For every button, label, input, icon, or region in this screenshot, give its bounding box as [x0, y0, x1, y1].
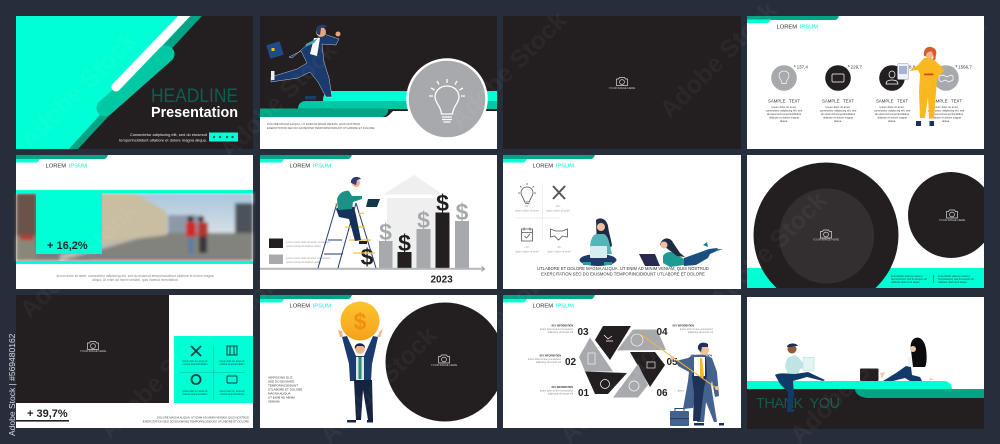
step numbers [565, 327, 678, 399]
social icon bar [209, 132, 238, 142]
key information notes: Ipsum dolor sit amet consectetur [540, 328, 573, 331]
text list: TEMPORINCIDIDUNT [268, 384, 298, 388]
key information notes: Ipsum dolor sit amet consectetur [528, 358, 561, 361]
slide 4: four icons with values: aliqua. [942, 119, 950, 123]
illustration: seated man [775, 343, 825, 412]
step numbers: 04 [656, 327, 668, 338]
illustration: man on ladder [318, 177, 380, 268]
stock watermark: Adobe Stock [864, 11, 992, 139]
key information notes: KEY INFORMATION [540, 354, 561, 358]
cyan icon panel: Ipsum dolor sit, amet elit [220, 360, 245, 363]
values: $ [848, 64, 850, 68]
icon labels: Ipsum dolor sit amet [515, 250, 539, 254]
legend: nostrud temporincididunt dolore [286, 245, 322, 248]
values: 229,7 [851, 64, 862, 70]
cyan icon panel: Ipsum dolor sit, amet elit [183, 390, 208, 393]
large circle placeholder [386, 302, 504, 422]
icon: calendar [522, 228, 532, 241]
metric: +39,7% [16, 408, 69, 422]
slide 4: four icons with values: utlabore et dolore magna [877, 116, 907, 120]
cyan icon panel: nostrud temporincididunt [219, 393, 245, 396]
bar chart: $ [456, 199, 469, 225]
slide 4: four icons with values: Ipsum dolor sit amet, [826, 105, 851, 109]
callout: +16,2%: + 16,2% [47, 240, 88, 252]
icon labels: Ipsum dolor sit amet [546, 208, 570, 212]
slide 4: four icons with values: utlabore et dolore magna [823, 116, 853, 120]
header tab [16, 155, 108, 162]
footer text: Sed eiusmod, sed do tempor elit [938, 278, 974, 281]
slide 7: four icons with women on laptops: EXERCITATION SEO DO EIUSMOND TEMPORINCIDIDUNT UTLABORE ET DOLORE [541, 272, 705, 276]
faded bank [383, 175, 443, 268]
icon: gold coin: $ [354, 308, 367, 334]
icon circles [771, 65, 959, 91]
slide 11: six-step hexagon diagram [503, 295, 741, 428]
presentation title: Presentation [151, 105, 238, 121]
slide title: LOREM IPSUM [46, 164, 87, 170]
slide 4: four icons with values: aliqua. [780, 119, 788, 123]
body text: UTLABORE ET DOLORE MAGNA ALIQUA. UT ENIM AD MINIM VENIAM, QUIS NOSTRUD [537, 266, 709, 271]
key information notes: adipiscing elit tempor elit [688, 331, 713, 334]
footer text: Utlabore dolor sunt aliqua [938, 281, 967, 284]
key information notes: Ipsum dolor sit amet consectetur [680, 328, 713, 331]
key information notes: Ipsum dolor sit amet consectetur [540, 390, 573, 392]
slide 7: four icons with women on laptops [503, 155, 741, 289]
slide 4: four icons with values: consectetur adipiscing elit, sed [820, 108, 857, 112]
stock watermark: Adobe Stock [214, 36, 342, 164]
sample text columns: SAMPLE TEXT [930, 98, 962, 104]
text list: VENIAM [268, 400, 280, 404]
slide title: LOREM IPSUM [532, 304, 574, 310]
headline: HEADLINE [151, 86, 238, 107]
legend: nostrud temporincididunt dolore [286, 261, 322, 264]
large circle placeholder: YOUR IMAGE HERE [813, 238, 839, 242]
icon labels: - 01 - [524, 204, 530, 208]
footer text: Exercitation ullamco nostrud [891, 275, 923, 278]
year label: 2023 [430, 274, 453, 286]
text list [268, 376, 302, 404]
values [794, 64, 972, 70]
icon: gold coin [340, 302, 380, 340]
slide 10: man holding coin [260, 295, 504, 428]
icon: camera [616, 78, 628, 86]
key information notes [528, 324, 713, 396]
step numbers: 03 [577, 327, 589, 338]
slide 8: circular image placeholders [747, 155, 984, 288]
thank you heading: THANK YOU [756, 396, 840, 412]
stock watermark: Adobe Stock [704, 186, 832, 314]
slide 4: four icons with values: do eiusmod temporincididunt [875, 112, 909, 116]
values: 1566,7 [958, 64, 972, 70]
text list: UTLABORE ET DOLORE [268, 388, 302, 392]
slide 4: four icons with values: Ipsum dolor sit amet, [934, 105, 959, 109]
body text: DOLORE MAGNA ALIQUA. UT ENIM AD MINIM VENIAM, QUIS NOSTRUD [157, 416, 249, 420]
slide 4: four icons with values: aliqua. [888, 119, 896, 123]
stock watermark: Adobe Stock [14, 26, 142, 154]
slide 3: image placeholder [503, 16, 741, 149]
legend: Lorem ipsum dolor sit amet, consectetur [286, 241, 331, 244]
slide 12: thank you [747, 297, 984, 429]
slide title: LOREM IPSUM [532, 164, 574, 170]
icon labels: Ipsum dolor sit amet [515, 208, 539, 212]
icon grid [515, 183, 571, 254]
slide title: LOREM IPSUM [290, 304, 331, 310]
slide 2: running businessman with lightbulb: EXERCITATION SEO DO EIUSMOND TEMPORINCIDIDUNT UTLABORE ET DOLORE [267, 126, 375, 130]
values: 137,4 [797, 64, 808, 70]
slide 4: four icons with values: consectetur adipiscing elit, sed [766, 108, 803, 112]
bar chart: $ [436, 190, 449, 216]
header tab [747, 16, 839, 23]
step numbers: 06 [656, 388, 668, 399]
body text: DOLORE MAGNA ALIQUA. UT ENIM AD MINIM VENIAM, QUIS NOSTRUD [267, 122, 360, 126]
slide 2: running businessman with lightbulb [260, 16, 497, 149]
values: $ [956, 64, 958, 68]
header tab [260, 155, 352, 162]
cyan icon panel: nostrud temporincididunt [182, 363, 208, 366]
cyan icon panel: nostrud temporincididunt [219, 363, 245, 366]
sample text columns [768, 98, 962, 104]
hexagon segments [579, 326, 666, 398]
slide 4: four icons with values: consectetur adipiscing elit, sed [928, 108, 965, 112]
bar chart: $ [398, 230, 411, 256]
icon: laptop [860, 368, 878, 381]
stock watermark: Adobe Stock [654, 0, 782, 124]
slide 4: four icons with values: do eiusmod temporincididunt [821, 112, 855, 116]
icon: bulb [518, 183, 536, 204]
icon: tools [553, 186, 565, 199]
axis arrow [260, 266, 486, 272]
illustration: seated woman [880, 338, 935, 381]
icon labels: - 04 - [556, 245, 562, 249]
key information notes: KEY INFORMATION [673, 324, 694, 328]
sample text columns: SAMPLE TEXT [768, 98, 800, 104]
key information notes: adipiscing elit tempor elit [536, 361, 561, 364]
step numbers: 05 [666, 357, 678, 368]
icon labels: - 02 - [555, 204, 561, 208]
slide 9: image with metric and cyan panel: EXERCITATION SEO DO EIUSMOND TEMPORINCIDIDUNT UTLABORE ET DOLORE [143, 420, 249, 424]
slide 4: four icons with values: do eiusmod temporincididunt [767, 112, 801, 116]
key information notes: KEY [689, 387, 694, 389]
text list: UT ENIM AD MINIM [268, 396, 295, 400]
key information notes: KEY INFORMATION [552, 386, 573, 389]
stock watermark: Adobe Stock [94, 316, 222, 444]
placeholder caption: YOUR IMAGE HERE [609, 86, 635, 90]
icon labels: - 03 - [524, 245, 530, 249]
footer text: Exercitation ullamco nostrud [938, 275, 970, 278]
legend [269, 238, 331, 264]
bar chart [361, 190, 469, 270]
illustration: woman with tablet [898, 47, 944, 126]
footer text: Sed eiusmod, sed do tempor elit [891, 278, 927, 281]
stock watermark: Adobe Stock [14, 196, 142, 324]
cyan icon panel: Ipsum dolor sit, amet elit [220, 390, 245, 393]
slide title: LOREM IPSUM [290, 164, 331, 170]
large circle placeholder [754, 162, 898, 288]
slide 1: headline cover: temporincididunt utlabore et dolore magna aliqua. [119, 138, 207, 142]
key information notes: adipiscing elit tempor elit [548, 331, 573, 334]
illustration: running man [266, 25, 340, 100]
slide 5: photo with +16,2%: aliqua. Ut enim ad minim veniam, quis nostrud exercitation [92, 278, 178, 282]
slide 6: growth bar chart with man on ladder [260, 155, 497, 289]
slide 4: four icons with values: do eiusmod temporincididunt [929, 112, 963, 116]
text list: MAGNA ALIQUA [268, 392, 291, 396]
stock watermark: Adobe Stock [484, 206, 612, 334]
slide 9: image with metric and cyan panel [16, 295, 253, 428]
icon labels [515, 204, 571, 254]
bar chart: $ [379, 219, 392, 245]
image placeholder: YOUR IMAGE HERE [80, 349, 106, 353]
key information notes: adipiscing elit tempor elit [548, 392, 573, 396]
icon: briefcase [670, 408, 689, 426]
step numbers: 01 [578, 388, 589, 399]
slide 4: four icons with values: consectetur adipiscing elit, sed [874, 108, 911, 112]
slide 5: photo with +16,2% [16, 155, 253, 289]
illustration: woman sitting cross-legged [580, 218, 616, 266]
key information notes: KEY INFORMATION [691, 354, 712, 358]
footer text: Utlabore dolor sunt aliqua [891, 281, 920, 284]
small circle placeholder: YOUR IMAGE HERE [939, 218, 965, 222]
cyan icon panel [174, 336, 253, 403]
metric: +39,7%: + 39,7% [27, 408, 68, 420]
text list: ADIPISCING ELIT, [268, 376, 293, 380]
key information notes: Ipsum [678, 390, 684, 392]
slide 4: four icons with values: utlabore et dolore magna [769, 116, 799, 120]
sample text columns: SAMPLE TEXT [876, 98, 908, 104]
icon: lightbulb in circle [408, 60, 486, 138]
stock watermark: Adobe Stock [444, 6, 572, 134]
caption: Ipsum dolor sit amet, consectetur adipiscing elit, sed do eiusmod temporincididunt utlabore et dolore magna [56, 274, 214, 278]
small circle placeholder [908, 172, 984, 258]
slide 4: four icons with values: Ipsum dolor sit amet, [772, 105, 797, 109]
icon labels: Ipsum dolor sit amet [547, 250, 571, 254]
stock id label: Adobe Stock | #569480162 [7, 333, 17, 436]
values: $ [794, 64, 796, 68]
slide title: LOREM IPSUM [776, 24, 818, 30]
stock watermark: Adobe Stock [219, 206, 347, 334]
footer text [891, 275, 974, 284]
values: 8,9 [909, 64, 916, 70]
callout: +16,2% [36, 193, 102, 254]
slide 1: headline cover [16, 12, 253, 149]
icon: handshake [550, 229, 568, 240]
large circle placeholder: YOUR IMAGE HERE [431, 363, 457, 367]
legend: Lorem ipsum dolor sit amet, consectetur [286, 257, 331, 260]
image placeholder [16, 295, 169, 403]
slide 4: four icons with values: Ipsum dolor sit amet, [880, 105, 905, 109]
bar chart: $ [361, 244, 374, 270]
cyan icon panel: Ipsum dolor sit, amet elit [183, 360, 208, 363]
cover caption: Consectetur adipiscing elit, sed do eiusmod [130, 132, 207, 137]
illustration: businessman arms raised [338, 329, 383, 422]
step numbers: 02 [565, 357, 576, 368]
photo [16, 193, 253, 261]
header tab [503, 295, 595, 302]
header tab [260, 295, 352, 302]
cyan strips [16, 190, 253, 264]
slide 4: four icons with values: aliqua. [834, 119, 842, 123]
bar chart: $ [417, 207, 430, 233]
slide 4: four icons with values: utlabore et dolore magna [931, 116, 961, 120]
illustration: man with pointer [640, 334, 724, 426]
slide 4: four icons with values [747, 16, 984, 149]
header tab [503, 155, 595, 162]
sample text columns: SAMPLE TEXT [822, 98, 854, 104]
key information notes: KEY INFORMATION [552, 324, 573, 328]
text list: SED DO EIUSMOD [268, 380, 295, 384]
cyan icon panel: nostrud temporincididunt [182, 393, 208, 396]
illustration: woman lying with laptop [639, 238, 723, 267]
